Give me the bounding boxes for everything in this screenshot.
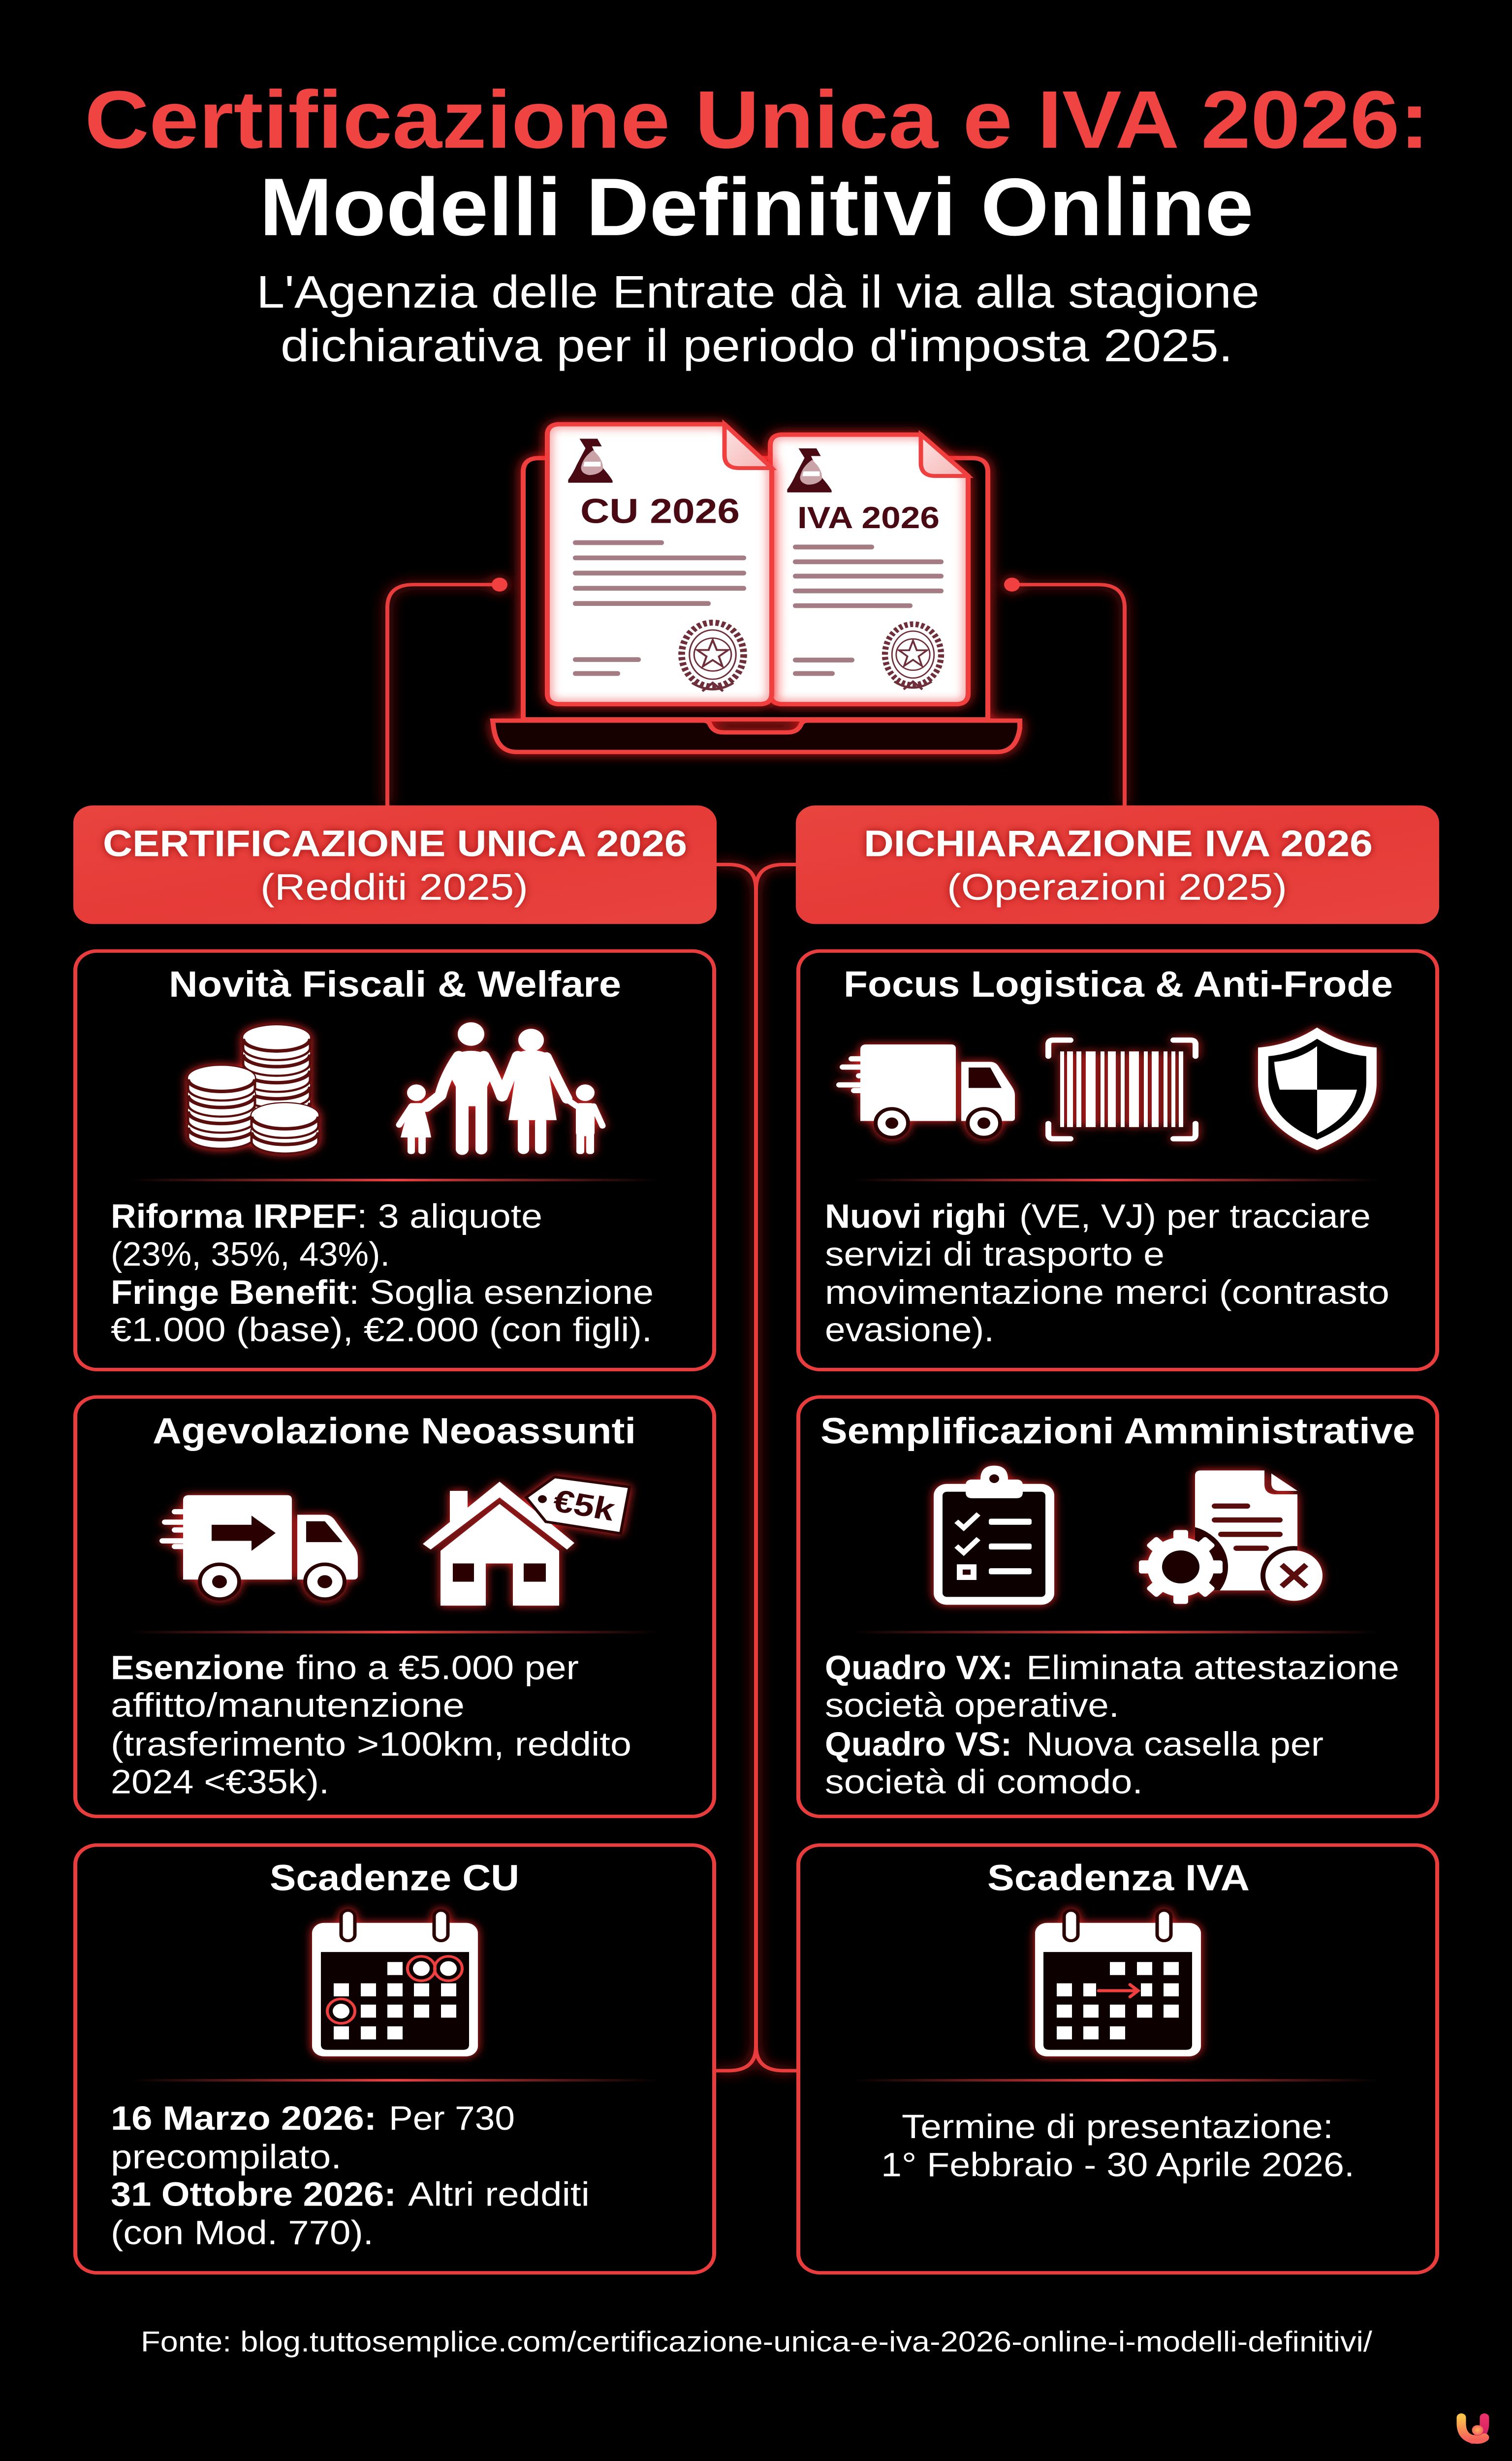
panel text: €1.000 (base), €2.000 (con figli). [111,1310,652,1349]
panel text [881,2107,1354,2184]
panel text: Termine di presentazione: [902,2107,1333,2145]
hero illustration: laptop with documents [493,424,1020,752]
document: IVA 2026 [770,435,968,704]
panel text: fino a €5.000 per [296,1648,579,1686]
logo [1461,2418,1484,2440]
panel: Agevolazione Neoassunti [75,1397,714,1816]
document: CU 2026 [547,424,772,704]
subtitle: dichiarativa per il periodo d'imposta 2025. [281,320,1233,371]
panel title: Scadenza IVA [987,1857,1250,1898]
header: Dichiarazione IVA 2026: (Operazioni 2025) [947,866,1287,908]
subtitle [256,266,1260,371]
document: IVA 2026: IVA 2026 [797,501,940,535]
panel text [111,2099,590,2251]
footer source: Fonte: blog.tuttosemplice.com/certificazione-unica-e-iva-2026-online-i-modelli-definitivi/ [141,2326,1373,2358]
document: CU 2026: CU 2026 [580,492,740,530]
panel text: Riforma IRPEF [111,1197,357,1235]
panel text: 31 Ottobre 2026: [111,2175,396,2213]
icon: delivery truck [839,1044,1015,1137]
panel text: Quadro VX: [825,1648,1013,1686]
header: Dichiarazione IVA 2026 [796,805,1439,924]
panel: Scadenze CU [75,1845,714,2273]
title [85,74,1429,252]
arrow [1099,1985,1138,1997]
icon: house with €5k tag [423,1477,630,1606]
header: Dichiarazione IVA 2026: DICHIARAZIONE IVA 2026 [864,822,1373,864]
panel text: evasione). [825,1310,994,1349]
connector: hero to Certificazione Unica header [387,578,507,806]
panel text: 1° Febbraio - 30 Aprile 2026. [881,2145,1354,2184]
header: Certificazione Unica 2026: CERTIFICAZIONE UNICA 2026 [103,822,687,864]
central connector trunk [714,864,798,2071]
panel text: Altri redditi [408,2175,590,2213]
panel: Scadenza IVA [798,1845,1437,2273]
panel: Novità Fiscali & Welfare [75,951,714,1370]
panel text [825,1648,1399,1801]
panel text: Esenzione [111,1648,284,1686]
icon: barcode scan [1048,1040,1196,1139]
panel text [825,1197,1389,1349]
panel title: Agevolazione Neoassunti [153,1410,636,1451]
subtitle: L'Agenzia delle Entrate dà il via alla stagione [256,266,1260,317]
panel text: precompilato. [111,2138,342,2176]
panel title: Semplificazioni Amministrative [820,1410,1415,1451]
panel text: affitto/manutenzione [111,1686,465,1724]
icon: house with €5k tag: €5k [550,1483,618,1528]
header: Certificazione Unica 2026 [73,805,717,924]
panel title: Novità Fiscali & Welfare [169,964,621,1005]
icon: shield [1258,1028,1377,1150]
icon: family [399,1022,602,1155]
header: Certificazione Unica 2026: (Redditi 2025) [260,866,528,908]
panel text: : 3 aliquote [357,1197,542,1235]
panel text: Nuovi righi [825,1197,1007,1235]
icon: calendar with circled dates [312,1910,478,2056]
title: Certificazione Unica e IVA 2026: [85,74,1429,165]
title: Modelli Definitivi Online [259,161,1254,252]
panel text: Per 730 [389,2099,515,2137]
panel text: società di comodo. [825,1763,1143,1801]
icon: calendar with arrow [1035,1910,1201,2056]
icon: moving truck [162,1495,358,1599]
panel text: Quadro VS: [825,1725,1012,1763]
connector: hero to Dichiarazione IVA header [1004,578,1125,806]
panel text: (VE, VJ) per tracciare [1019,1197,1371,1235]
panel text [111,1197,654,1349]
icon: document, gear and cancel [1134,1470,1327,1609]
panel: Focus Logistica & Anti-Frode [798,951,1437,1370]
panel text [111,1648,631,1801]
panel text: 2024 <€35k). [111,1763,329,1801]
panel text: società operative. [825,1686,1119,1724]
panel: Semplificazioni Amministrative [798,1397,1437,1816]
panel text: 16 Marzo 2026: [111,2099,377,2137]
panel text: (con Mod. 770). [111,2213,374,2251]
icon: clipboard checklist [938,1466,1050,1601]
panel text: (23%, 35%, 43%). [111,1235,390,1273]
icon: coin stacks [188,1025,318,1154]
laptop [493,458,1020,752]
panel title: Scadenze CU [270,1857,519,1898]
panel text: movimentazione merci (contrasto [825,1273,1389,1311]
panel text: servizi di trasporto e [825,1235,1165,1273]
panel text: Eliminata attestazione [1026,1648,1399,1686]
panel text: (trasferimento >100km, reddito [111,1725,631,1763]
panel text: Nuova casella per [1026,1725,1323,1763]
panel text: : Soglia esenzione [349,1273,654,1311]
panel text: Fringe Benefit [111,1273,349,1311]
panel title: Focus Logistica & Anti-Frode [844,964,1393,1005]
